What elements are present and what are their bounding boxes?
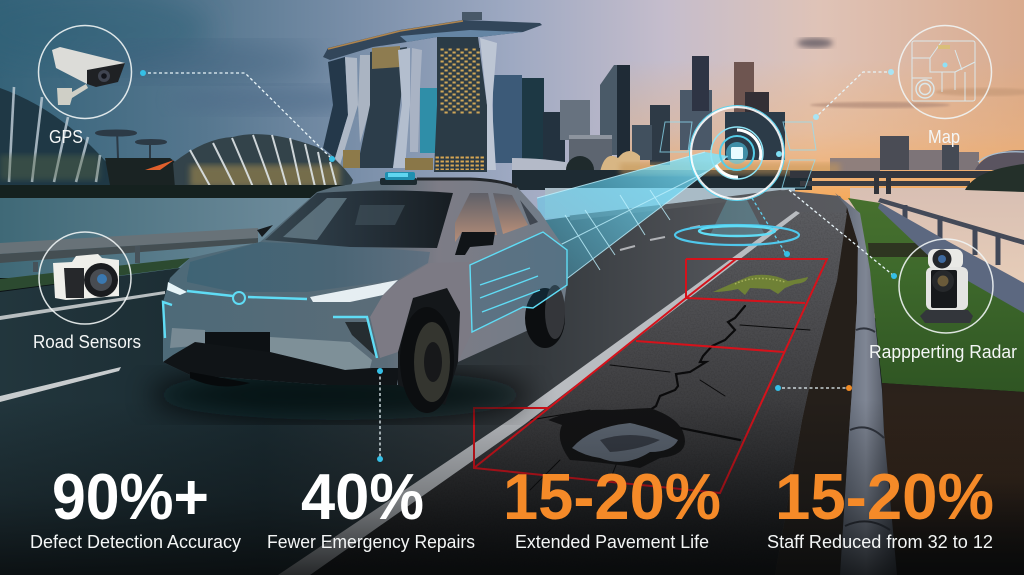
stat: fewer emergency repairs: Fewer Emergency Repairs xyxy=(267,532,475,552)
label: Rappperting Radar: Rappperting Radar xyxy=(869,342,1017,362)
trench beside the road xyxy=(775,207,858,575)
skypark deck xyxy=(323,20,542,60)
connector: hub to crocodile xyxy=(752,198,790,257)
car wheel arch xyxy=(398,288,460,405)
car roof rail xyxy=(417,179,517,187)
holographic scanner hub xyxy=(660,106,816,245)
skyline: distant city buildings xyxy=(493,56,1024,190)
bridge xyxy=(790,164,1024,194)
icon: road sensor camera xyxy=(39,232,131,324)
road: white lane dashes xyxy=(0,226,700,402)
label: GPS: GPS xyxy=(49,127,83,147)
landmark: Marina Bay Sands towers xyxy=(323,12,542,172)
guardrail: left of road xyxy=(0,228,258,291)
car door hologram panel xyxy=(470,232,567,332)
road surface xyxy=(0,190,880,575)
car front wheel xyxy=(400,307,454,413)
stat: staff reduced: Staff Reduced from 32 to 12 xyxy=(767,532,993,552)
water: bay left xyxy=(0,198,310,278)
stat: defect detection accuracy: Defect Detection Accuracy xyxy=(30,532,241,552)
connector: pavement to pipe xyxy=(775,385,852,391)
car LED strips xyxy=(163,291,377,358)
connector: car to stats xyxy=(377,368,383,462)
crocodile on the road xyxy=(713,275,808,295)
scanning beam from car to hub xyxy=(537,152,728,290)
label: Map: Map xyxy=(928,127,960,147)
car rear wheel xyxy=(525,285,565,348)
stat: extended pavement life: Extended Pavement Life xyxy=(515,532,709,552)
pothole with standing water xyxy=(548,408,685,468)
hub ground rings xyxy=(675,225,799,245)
icon: PTZ radar camera xyxy=(899,239,993,333)
grass verge xyxy=(848,198,1024,392)
landmark: Gardens by the Bay domes and supertrees xyxy=(0,87,353,199)
stat: fewer emergency repairs: 40% xyxy=(301,460,424,533)
road: white edge line xyxy=(278,211,800,575)
grass bank shadow xyxy=(868,243,935,257)
asphalt shoulder with cracks xyxy=(310,212,847,575)
guardrail: right xyxy=(878,198,1024,313)
connector: Map to hub xyxy=(813,69,894,120)
hub side panels xyxy=(660,122,816,188)
background: dusk sky xyxy=(0,0,1024,230)
stat: staff reduced: 15-20% xyxy=(775,460,994,533)
car front fender highlight xyxy=(370,262,472,362)
tower one xyxy=(323,57,348,158)
red detection grid on pavement xyxy=(474,259,827,493)
car lower fascia xyxy=(170,328,205,348)
hub concentric rings xyxy=(690,106,784,200)
tower three xyxy=(434,37,487,172)
car windshield xyxy=(265,190,453,248)
stat: fewer emergency repairs xyxy=(267,460,475,552)
car headlight xyxy=(310,280,398,302)
water: river behind road xyxy=(545,188,795,218)
tower two xyxy=(357,47,407,168)
connector: GPS to domes xyxy=(140,70,335,162)
stat: defect detection accuracy: 90%+ xyxy=(52,460,209,533)
connector: Radar to hub xyxy=(789,190,897,279)
car hood xyxy=(187,242,430,292)
car: connected SUV with sensors xyxy=(163,172,568,413)
water: river right xyxy=(850,188,1024,318)
soil embankment xyxy=(882,383,1024,575)
label: Road Sensors: Road Sensors xyxy=(33,332,141,352)
car side windows xyxy=(455,193,497,242)
hub light column xyxy=(710,200,765,235)
icon: city map xyxy=(898,26,992,118)
road: far median rail xyxy=(570,192,790,218)
pipe: underground utility guardrail xyxy=(835,193,897,575)
car body xyxy=(163,178,568,395)
bottom fade behind stats xyxy=(0,400,1024,575)
car shadow xyxy=(150,370,530,420)
stat: defect detection accuracy xyxy=(30,460,241,552)
car door mirrors xyxy=(455,232,495,255)
stat: extended pavement life: 15-20% xyxy=(503,460,721,533)
car roof unit xyxy=(380,172,417,185)
glass building between towers xyxy=(420,88,437,153)
icon: GPS security camera xyxy=(38,26,132,118)
